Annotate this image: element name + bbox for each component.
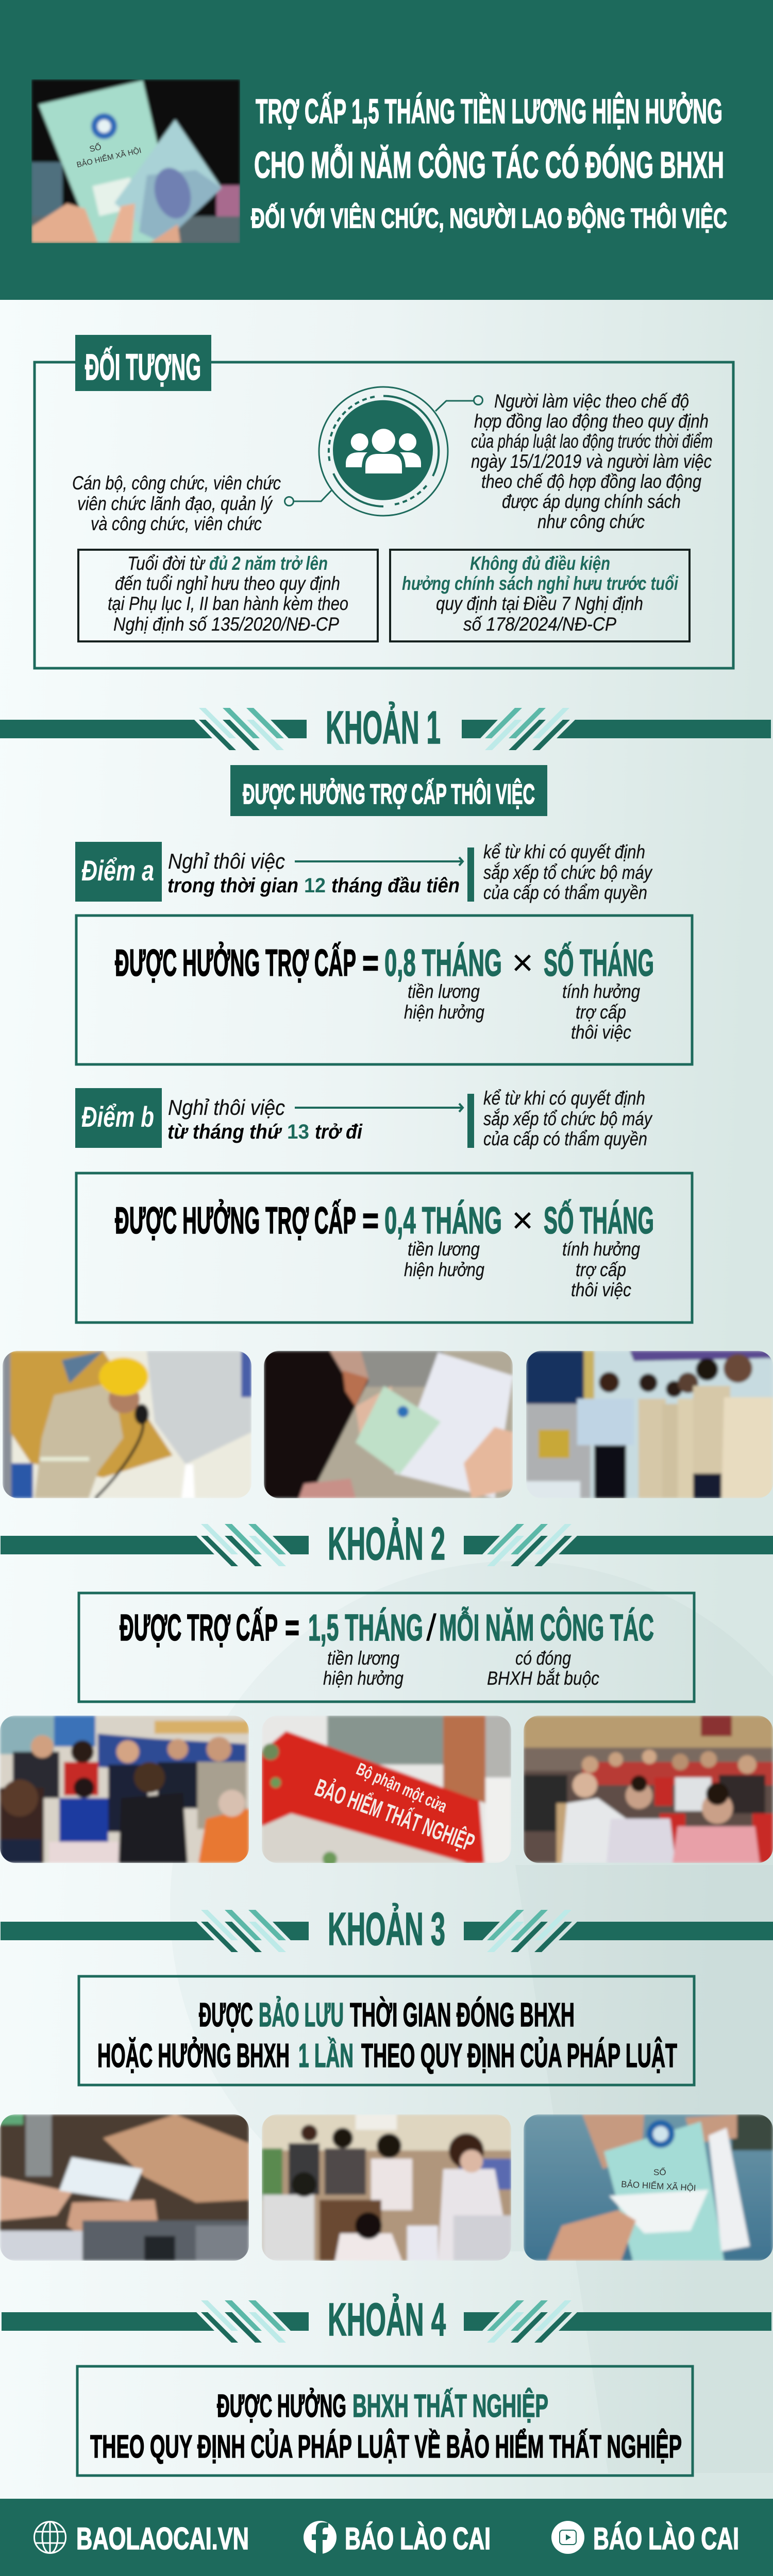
text: point a condition: [167, 849, 460, 897]
photo: unemployment insurance office sign: BẢO HIỂM THẤT NGHIỆP: [311, 1773, 478, 1857]
formula box: 0.4 month: trợ cấp: [576, 1259, 626, 1280]
formula box: 0.4 month: ×: [512, 1200, 533, 1241]
formula box: 1.5 months per year: ĐƯỢC TRỢ CẤP: [120, 1607, 278, 1649]
text: contract workers: [471, 391, 713, 532]
text: point b timing: của cấp có thẩm quyền: [483, 1128, 647, 1149]
text: contract workers: như công chức: [537, 511, 645, 532]
text: point b timing: sắp xếp tổ chức bộ máy: [483, 1108, 653, 1129]
photo: unemployment insurance office sign: Bộ phận một cửa: [354, 1759, 450, 1817]
photo: unemployment insurance office sign: [262, 1716, 511, 1866]
section banner: Khoản 2: [1, 1517, 773, 1570]
text: officials: [72, 472, 281, 534]
text: contract workers: được áp dụng chính sách: [502, 491, 681, 512]
section banner: Khoản 3: KHOẢN 3: [328, 1903, 445, 1955]
section banner: Khoản 1: [0, 701, 771, 754]
point b row: [75, 1088, 653, 1149]
formula box: 1.5 months per year: 1,5 THÁNG: [308, 1607, 423, 1649]
text: point b condition: 13: [287, 1121, 309, 1143]
badge: point b: [75, 1088, 162, 1148]
text box: keep contribution period: ĐƯỢC: [199, 1996, 253, 2033]
point a row: [75, 841, 653, 903]
photo: teacher and students in workshop: [526, 1351, 773, 1498]
text: point a condition: trong thời gian: [167, 874, 298, 897]
formula box: 0.4 month: ĐƯỢC HƯỞNG TRỢ CẤP: [115, 1200, 356, 1242]
connector: right: [435, 396, 482, 411]
photo: hands holding insurance card: [0, 2114, 249, 2261]
text: point b condition: Nghỉ thôi việc: [168, 1095, 285, 1120]
section banner: Khoản 1: KHOẢN 1: [326, 701, 441, 754]
formula box: 0.4 month: =: [362, 1200, 379, 1242]
text box: keep contribution period: 1 LẦN: [298, 2037, 354, 2074]
formula box: 0.8 month: hiện hưởng: [404, 1002, 484, 1023]
formula box: 0.4 month: [76, 1173, 692, 1323]
arrow: [295, 857, 463, 866]
text: point b condition: trở đi: [315, 1121, 363, 1143]
text box: unemployment insurance: ĐƯỢC HƯỞNG: [217, 2388, 346, 2424]
icon: youtube: [551, 2521, 584, 2554]
photo: woman reading insurance book: [264, 1351, 513, 1498]
formula box: 0.8 month: ĐƯỢC HƯỞNG TRỢ CẤP: [115, 942, 356, 984]
section banner: Khoản 4: [2, 2293, 771, 2346]
header band: [0, 0, 773, 300]
formula box: 1.5 months per year: hiện hưởng: [323, 1668, 404, 1689]
formula box: 0.8 month: =: [362, 942, 379, 984]
photo: seated audience: [524, 1716, 773, 1863]
heading: severance allowance: ĐƯỢC HƯỞNG TRỢ CẤP THÔI VIỆC: [243, 778, 535, 810]
heading: target group: [75, 335, 211, 391]
formula box: 0.8 month: SỐ THÁNG: [544, 942, 654, 984]
formula box: 1.5 months per year: =: [285, 1607, 299, 1649]
heading: severance allowance: [230, 765, 547, 816]
text: point b timing: [467, 1088, 653, 1149]
text: contract workers: Người làm việc theo chế độ: [494, 391, 689, 412]
photo: hands holding social insurance book: SỔ: [653, 2167, 666, 2177]
header photo: social insurance book and banknotes: [31, 79, 240, 243]
text box: keep contribution period: BẢO LƯU: [259, 1996, 344, 2033]
formula box: 0.4 month: tính hưởng: [562, 1239, 640, 1260]
condition box: age: [78, 550, 378, 641]
condition box: age: Nghị định số 135/2020/NĐ-CP: [113, 614, 339, 635]
section banner: Khoản 2: KHOẢN 2: [328, 1517, 445, 1570]
header photo: social insurance book and banknotes: SỔ: [89, 142, 102, 154]
badge: point b: Điểm b: [81, 1100, 154, 1133]
condition box: early retirement: [390, 550, 690, 641]
text box: unemployment insurance: BHXH THẤT NGHIỆP: [352, 2388, 548, 2424]
header photo: social insurance book and banknotes: BẢO HIỂM XÃ HỘI: [76, 145, 142, 170]
photo: hands holding social insurance book: BẢO HIỂM XÃ HỘI: [621, 2179, 696, 2193]
formula box: 1.5 months per year: có đóng: [515, 1648, 571, 1669]
condition box: early retirement: số 178/2024/NĐ-CP: [463, 614, 616, 635]
text: point a condition: tháng đầu tiên: [331, 874, 460, 897]
icon: globe: [34, 2521, 66, 2553]
text box: keep contribution period: HOẶC HƯỞNG BHXH: [97, 2037, 290, 2074]
condition box: age: tại Phụ lục I, II ban hành kèm theo: [108, 593, 348, 614]
formula box: 1.5 months per year: BHXH bắt buộc: [487, 1668, 599, 1689]
condition box: early retirement: hưởng chính sách nghỉ hưu trước tuổi: [402, 573, 679, 594]
condition box: age: Tuổi đời từ: [127, 553, 206, 574]
panel: target group: [35, 335, 733, 668]
condition box: early retirement: Không đủ điều kiện: [470, 553, 610, 574]
section banner: Khoản 4: KHOẢN 4: [328, 2293, 446, 2346]
photo: hands holding social insurance book: [524, 2114, 773, 2261]
text: point a timing: sắp xếp tổ chức bộ máy: [483, 862, 653, 883]
text: contract workers: hợp đồng lao động theo quy định: [474, 411, 709, 432]
formula box: 0.4 month: thôi việc: [571, 1279, 631, 1300]
formula box: 0.8 month: thôi việc: [571, 1022, 631, 1043]
formula box: 1.5 months per year: tiền lương: [327, 1648, 399, 1669]
heading: target group: ĐỐI TƯỢNG: [85, 347, 201, 388]
text box: keep contribution period: [79, 1976, 694, 2085]
formula box: 0.8 month: tiền lương: [408, 981, 480, 1002]
text: officials: viên chức lãnh đạo, quản lý: [77, 493, 273, 514]
arrow: [295, 1104, 463, 1112]
text: point a condition: 12: [304, 874, 326, 897]
condition box: age: đủ 2 năm trở lên: [209, 553, 328, 574]
icon: facebook: [304, 2521, 337, 2554]
section banner: Khoản 3: [1, 1903, 773, 1955]
formula box: 0.4 month: hiện hưởng: [404, 1259, 484, 1280]
formula box: 0.4 month: tiền lương: [408, 1239, 480, 1260]
photo: worker with yellow helmet: [3, 1351, 251, 1498]
text: point b condition: [167, 1095, 363, 1143]
website label: BAOLAOCAI.VN: [76, 2521, 249, 2556]
badge: point a: [75, 842, 162, 902]
text: contract workers: ngày 15/1/2019 và người làm việc: [471, 451, 712, 472]
icon: people in rings: [319, 387, 448, 516]
formula box: 0.8 month: ×: [512, 942, 533, 984]
text: officials: Cán bộ, công chức, viên chức: [72, 472, 281, 494]
formula box: 0.4 month: 0,4 THÁNG: [384, 1200, 502, 1242]
text: point b condition: từ tháng thứ: [167, 1121, 282, 1143]
text: point a condition: Nghỉ thôi việc: [168, 849, 285, 873]
formula box: 1.5 months per year: /: [426, 1607, 436, 1649]
condition box: early retirement: quy định tại Điều 7 Nghị định: [436, 593, 643, 614]
text: point a timing: kể từ khi có quyết định: [483, 841, 645, 862]
formula box: 0.8 month: tính hưởng: [562, 981, 640, 1002]
condition box: age: đến tuổi nghỉ hưu theo quy định: [115, 573, 340, 594]
footer band: [0, 2499, 773, 2576]
photo: job fair crowd: [0, 1716, 249, 1863]
text: officials: và công chức, viên chức: [91, 513, 262, 534]
formula box: 0.8 month: [76, 916, 692, 1064]
badge: point a: Điểm a: [81, 854, 154, 887]
text: point b timing: kể từ khi có quyết định: [483, 1088, 645, 1109]
connector: left: [284, 490, 331, 506]
text: point a timing: [467, 841, 653, 903]
text box: keep contribution period: THỜI GIAN ĐÓNG BHXH: [350, 1996, 575, 2033]
facebook label: BÁO LÀO CAI: [345, 2521, 491, 2556]
formula box: 1.5 months per year: [79, 1593, 694, 1702]
formula box: 0.8 month: 0,8 THÁNG: [384, 942, 502, 984]
text: point a timing: của cấp có thẩm quyền: [483, 882, 647, 903]
formula box: 0.8 month: trợ cấp: [576, 1002, 626, 1023]
text: contract workers: theo chế độ hợp đồng lao động: [481, 471, 701, 492]
formula box: 0.4 month: SỐ THÁNG: [544, 1199, 654, 1242]
photo: insurance service counter: [262, 2114, 511, 2261]
text box: unemployment insurance: [77, 2366, 693, 2476]
